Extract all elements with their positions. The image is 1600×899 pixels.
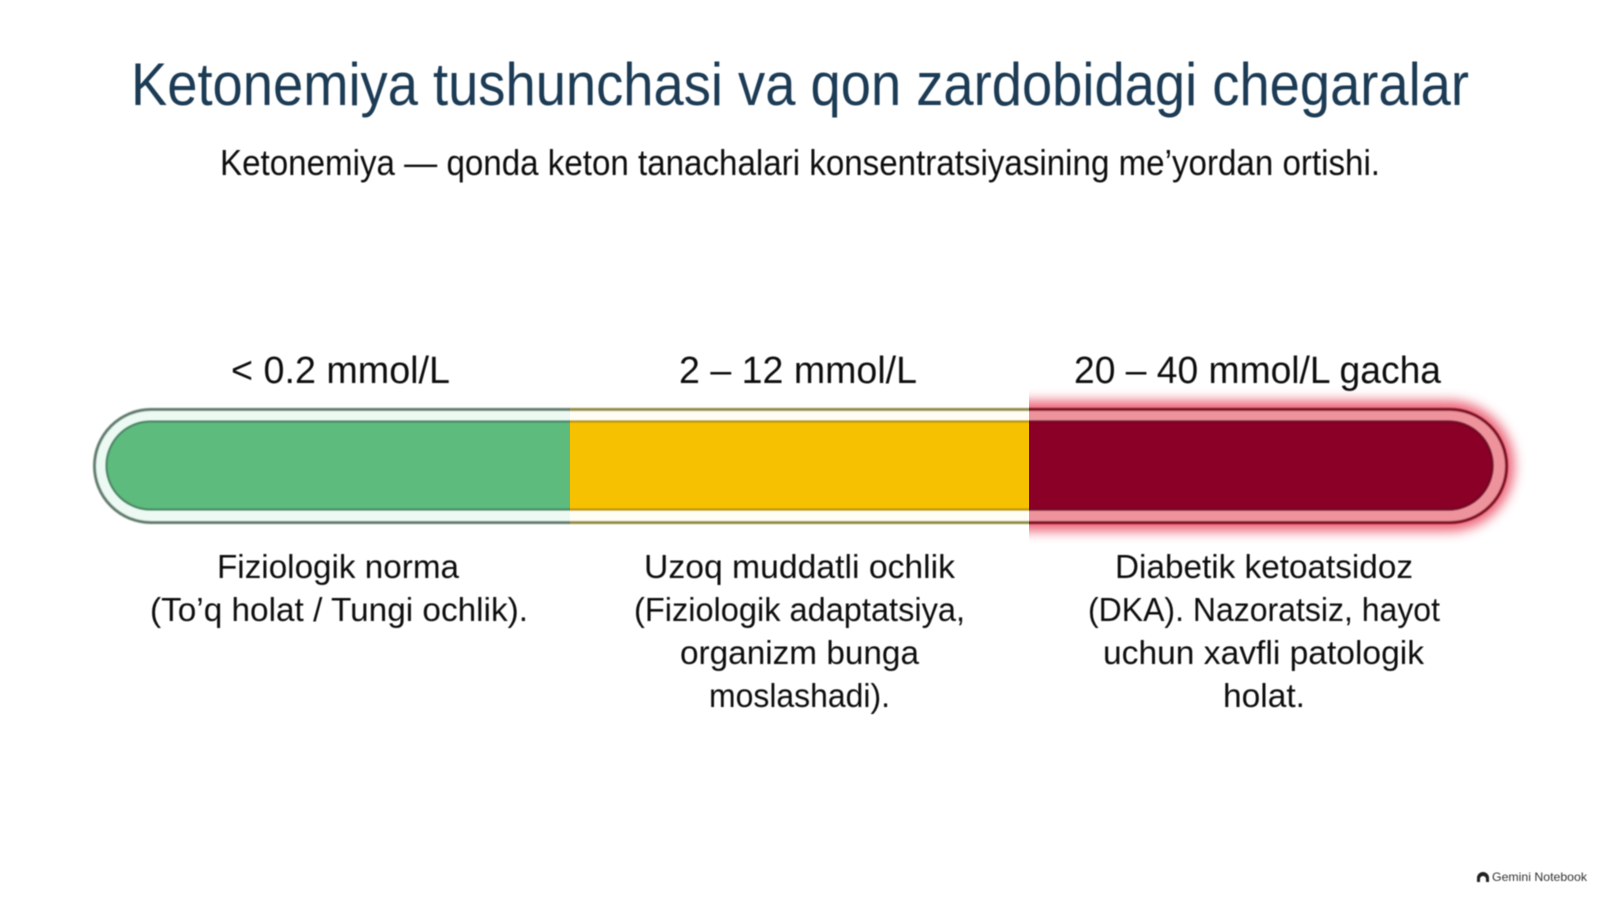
description: prolonged fasting: organizm bunga <box>680 634 920 671</box>
description: prolonged fasting: moslashadi). <box>709 677 890 714</box>
ketone level gauge bar <box>88 401 1514 531</box>
label: fasting range: 2 – 12 mmol/L <box>679 350 917 392</box>
segment: green normal zone <box>92 407 570 525</box>
descriptions <box>150 548 1440 714</box>
label: normal range: < 0.2 mmol/L <box>231 350 450 392</box>
description: diabetic ketoacidosis: (DKA). Nazoratsiz, hayot <box>1088 591 1440 628</box>
description: diabetic ketoacidosis: holat. <box>1223 677 1305 714</box>
icon: watermark logo <box>1477 872 1489 882</box>
description: normal: (To’q holat / Tungi ochlik). <box>150 591 528 628</box>
label: DKA range: 20 – 40 mmol/L gacha <box>1074 350 1442 392</box>
description: normal: Fiziologik norma <box>217 548 460 585</box>
description: normal <box>150 548 528 628</box>
value labels <box>231 350 1442 392</box>
segment: yellow adaptation zone <box>570 406 1029 526</box>
watermark text: Gemini Notebook <box>1492 870 1588 884</box>
subtitle: Ketonemiya — qonda keton tanachalari konsentratsiyasining me’yordan ortishi. <box>220 142 1380 183</box>
segment: red danger zone with glow <box>1029 392 1523 540</box>
watermark <box>1477 870 1588 884</box>
description: diabetic ketoacidosis: uchun xavfli patologik <box>1103 634 1425 671</box>
title: Ketonemiya tushunchasi va qon zardobidagi chegaralar <box>131 51 1469 118</box>
description: diabetic ketoacidosis: Diabetik ketoatsidoz <box>1115 548 1413 585</box>
description: prolonged fasting: Uzoq muddatli ochlik <box>644 548 956 585</box>
description: prolonged fasting: (Fiziologik adaptatsiya, <box>634 591 965 628</box>
description: diabetic ketoacidosis <box>1088 548 1440 714</box>
description: prolonged fasting <box>634 548 965 714</box>
